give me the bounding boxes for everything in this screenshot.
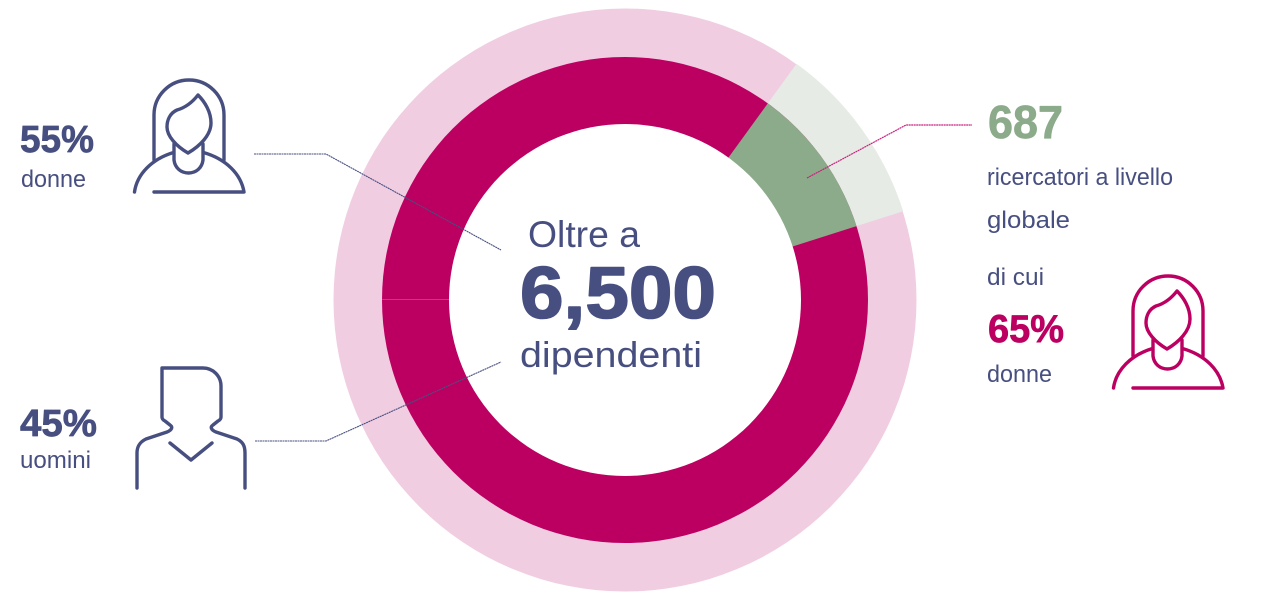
stat: 55% women: 55% [20, 119, 94, 161]
leader line: men [255, 362, 501, 441]
inner ring segment: researchers [625, 103, 856, 300]
stat: 687 researchers: di cui [987, 264, 1044, 291]
stat: 687 researchers: donne [987, 361, 1052, 388]
stat: 687 researchers [987, 96, 1173, 388]
donut chart [334, 8, 916, 592]
stat: 687 researchers: 65% [988, 308, 1064, 351]
icon: man navy [137, 368, 245, 488]
stat: 55% women: donne [21, 166, 86, 193]
stat: 45% men: uomini [20, 447, 91, 474]
center text: dipendenti [520, 334, 702, 375]
leader line: researchers [807, 125, 972, 178]
outer ring: total women share [334, 8, 916, 592]
inner ring: employees [382, 57, 868, 543]
center text: Oltre a [528, 214, 640, 255]
stat: 687 researchers: globale [987, 207, 1070, 234]
icon: woman magenta [1114, 276, 1223, 388]
stat: 687 researchers: 687 [988, 96, 1063, 148]
center text: 6,500 [520, 253, 716, 334]
icon: woman navy [134, 80, 244, 192]
stat: 687 researchers: ricercatori a livello [987, 164, 1173, 191]
stat: 45% men: 45% [20, 403, 97, 445]
center text [520, 214, 716, 375]
stat: 45% men [20, 403, 97, 474]
stat: 55% women [20, 119, 94, 193]
outer ring segment: researchers [625, 64, 903, 300]
leader line: women [254, 154, 501, 250]
donut hole [449, 124, 801, 476]
